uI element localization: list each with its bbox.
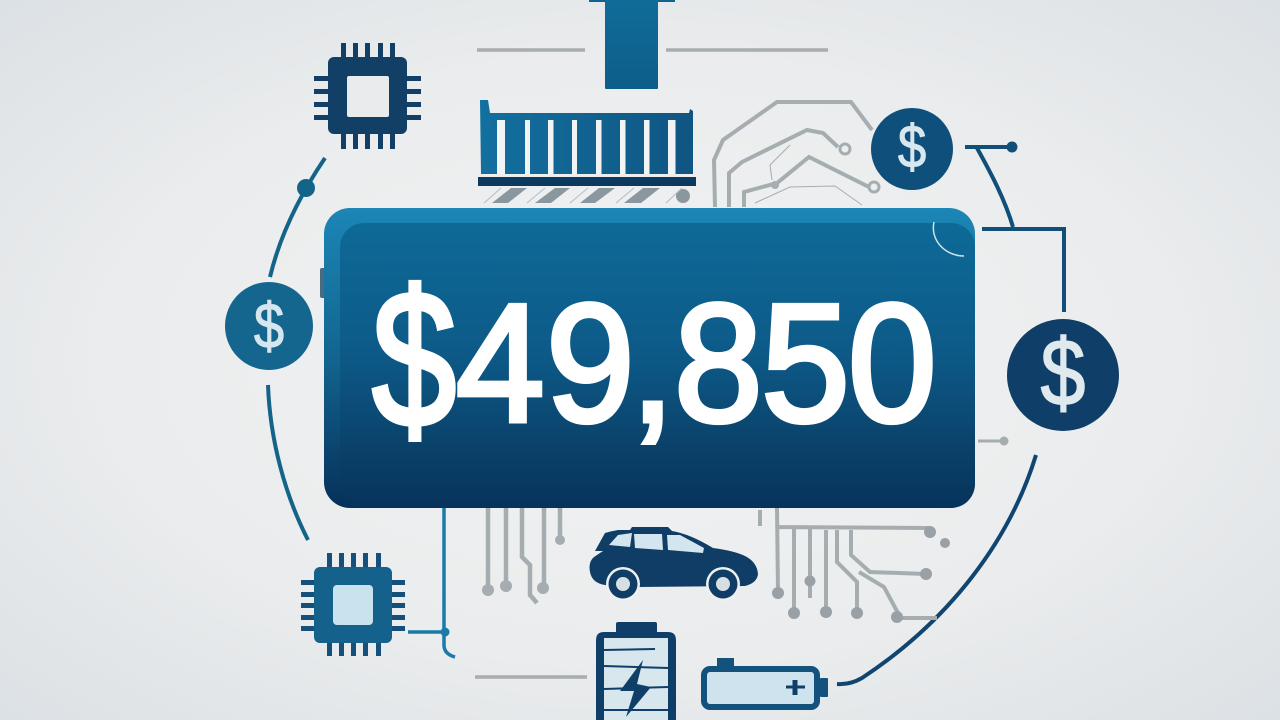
icon: dollar coin left — [225, 282, 313, 370]
panel: main price card — [320, 208, 975, 508]
icon: big dollar coin right: $ — [1041, 319, 1085, 425]
icon: car — [590, 527, 758, 601]
price value: 49,850 — [456, 269, 937, 457]
connector stub right — [978, 436, 1008, 446]
icon: dollar coin left: $ — [254, 290, 284, 362]
connector: top right coin to big coin — [965, 142, 1064, 312]
icon: big dollar coin right — [1007, 319, 1119, 431]
icon: dollar coin top right — [871, 108, 953, 190]
arc: lower right connector — [837, 455, 1036, 684]
price value: $ — [372, 251, 456, 467]
circuit traces: bottom right — [760, 508, 950, 623]
circuit traces: bottom centre left — [482, 508, 565, 603]
icon: chip top left — [314, 43, 421, 149]
icon: dollar coin top right: $ — [898, 113, 926, 180]
connector: bottom left chip line — [408, 508, 455, 657]
arc: upper left connector — [270, 158, 325, 277]
top connector post — [477, 0, 828, 89]
icon: shipping container — [478, 100, 696, 203]
icon: charging battery — [596, 622, 676, 720]
divider line left of battery — [475, 675, 587, 679]
icon: chip bottom left — [301, 553, 405, 656]
arc: lower left connector — [268, 385, 308, 540]
circuit traces: top right — [714, 102, 879, 207]
icon: horizontal battery — [704, 658, 828, 707]
